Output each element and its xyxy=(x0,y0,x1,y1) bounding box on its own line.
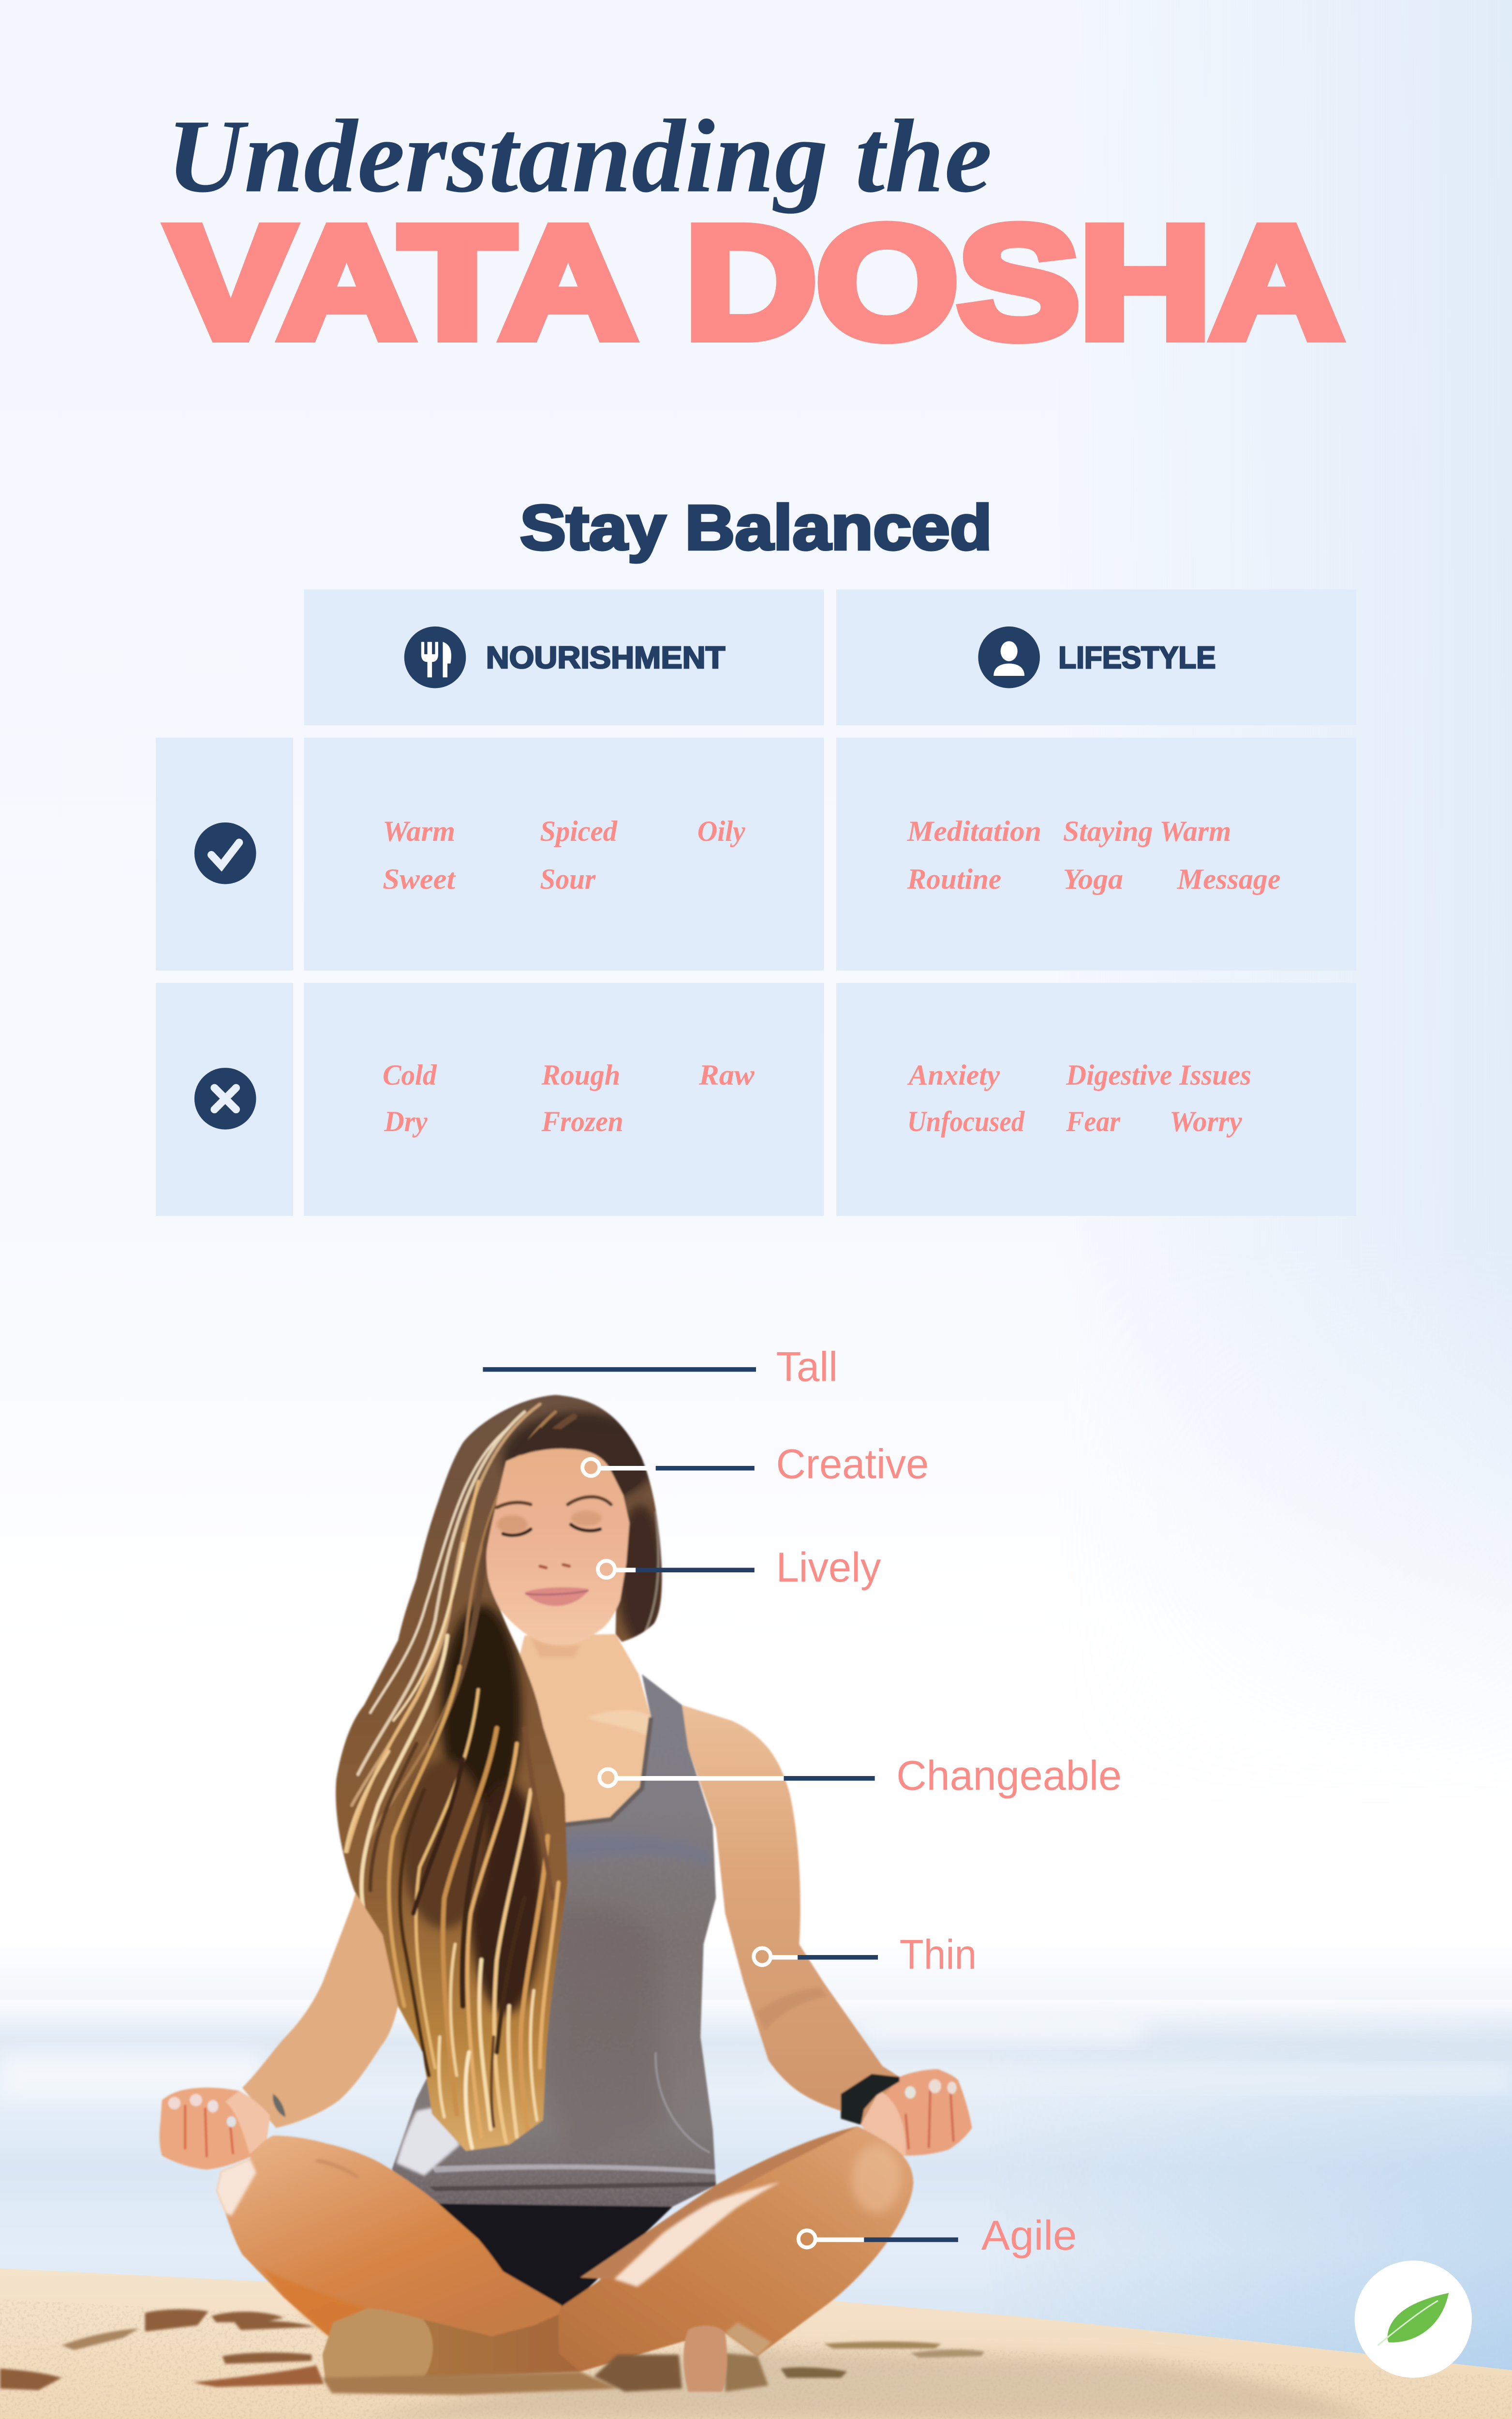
title: Understanding the: Understanding the xyxy=(166,98,992,214)
cell: nourishment favor: Sour xyxy=(540,863,596,896)
black shorts xyxy=(429,2203,673,2308)
right hand xyxy=(861,2069,972,2156)
cell: nourishment favor: Spiced xyxy=(540,815,618,848)
cell: lifestyle avoid: Fear xyxy=(1066,1105,1121,1138)
table: stay balanced xyxy=(156,589,1356,1216)
elbow shading xyxy=(756,1987,827,2031)
cell: lifestyle favor: Meditation xyxy=(907,815,1041,848)
neck and chest xyxy=(509,1634,651,1825)
title: VATA DOSHA: VATA xyxy=(168,194,636,371)
callout: Agile xyxy=(799,2212,1077,2259)
callout: Tall: Tall xyxy=(776,1344,838,1390)
cell: nourishment favor: Warm xyxy=(383,815,455,848)
right crossed leg xyxy=(559,2126,913,2372)
chest shading xyxy=(586,1710,651,1736)
callout: Changeable: Changeable xyxy=(896,1753,1122,1799)
hair fringe over forehead xyxy=(506,1427,642,1495)
left hand xyxy=(160,2088,270,2169)
eyes, brows, nose and lips xyxy=(497,1497,611,1606)
header cell: nourishment: NOURISHMENT xyxy=(486,640,725,675)
row icon: recommended xyxy=(156,738,293,971)
cell: lifestyle favor: Message xyxy=(1177,863,1281,896)
left arm xyxy=(242,1885,401,2128)
callout: Agile: Agile xyxy=(981,2212,1077,2259)
lower leg and shin xyxy=(323,2295,685,2382)
sand clumps around feet xyxy=(323,2353,769,2395)
callout: Creative xyxy=(582,1441,929,1487)
cell: nourishment avoid: Dry xyxy=(384,1105,428,1138)
callout: Changeable xyxy=(599,1753,1122,1799)
logo: white circle with green leaf xyxy=(1355,2260,1472,2378)
callout: Lively xyxy=(598,1544,881,1591)
heading: Stay Balanced: Stay Balanced xyxy=(520,492,992,563)
callout: Lively: Lively xyxy=(776,1544,881,1591)
cell: nourishment favor: Sweet xyxy=(383,863,456,896)
cell: nourishment avoid: Cold xyxy=(383,1059,437,1091)
cell: nourishment avoid: Raw xyxy=(698,1059,755,1091)
cell: nourishment avoid: Rough xyxy=(541,1059,620,1091)
callout: Thin: Thin xyxy=(900,1932,977,1978)
cell: nourishment avoid: Frozen xyxy=(541,1105,623,1138)
callout: Thin xyxy=(754,1932,977,1978)
cell: lifestyle favor xyxy=(836,738,1356,971)
illustration: seated woman meditating xyxy=(160,1389,972,2395)
left crossed leg xyxy=(216,2135,562,2336)
header cell: lifestyle: LIFESTYLE xyxy=(1058,640,1216,675)
cell: lifestyle avoid: Unfocused xyxy=(907,1105,1025,1138)
face xyxy=(487,1448,629,1645)
right arm and shoulder xyxy=(664,1697,900,2125)
left foot xyxy=(323,2308,433,2382)
cell: nourishment avoid xyxy=(304,983,824,1216)
title: VATA DOSHA: DOSHA xyxy=(685,194,1342,371)
cell: lifestyle favor: Routine xyxy=(907,863,1001,896)
cell: lifestyle avoid: Worry xyxy=(1170,1105,1243,1138)
cell: nourishment favor: Oily xyxy=(697,815,746,848)
row icon: avoid xyxy=(156,983,293,1216)
neck shadow and chin xyxy=(531,1637,580,1657)
cell: lifestyle favor: Yoga xyxy=(1063,863,1123,896)
header cell: nourishment xyxy=(304,589,824,725)
cell: nourishment favor xyxy=(304,738,824,971)
callout: Creative: Creative xyxy=(776,1441,929,1487)
cell: lifestyle avoid: Anxiety xyxy=(907,1059,1000,1091)
cell: lifestyle favor: Staying Warm xyxy=(1063,815,1231,848)
tank top xyxy=(392,1674,716,2207)
tattoo xyxy=(273,2094,285,2117)
cell: lifestyle avoid xyxy=(836,983,1356,1216)
cell: lifestyle avoid: Digestive Issues xyxy=(1066,1059,1251,1091)
wristband xyxy=(841,2074,900,2125)
long hair xyxy=(334,1393,664,2152)
title: VATA DOSHA xyxy=(168,194,1342,371)
header cell: lifestyle xyxy=(836,589,1356,725)
right foot xyxy=(683,2326,727,2392)
